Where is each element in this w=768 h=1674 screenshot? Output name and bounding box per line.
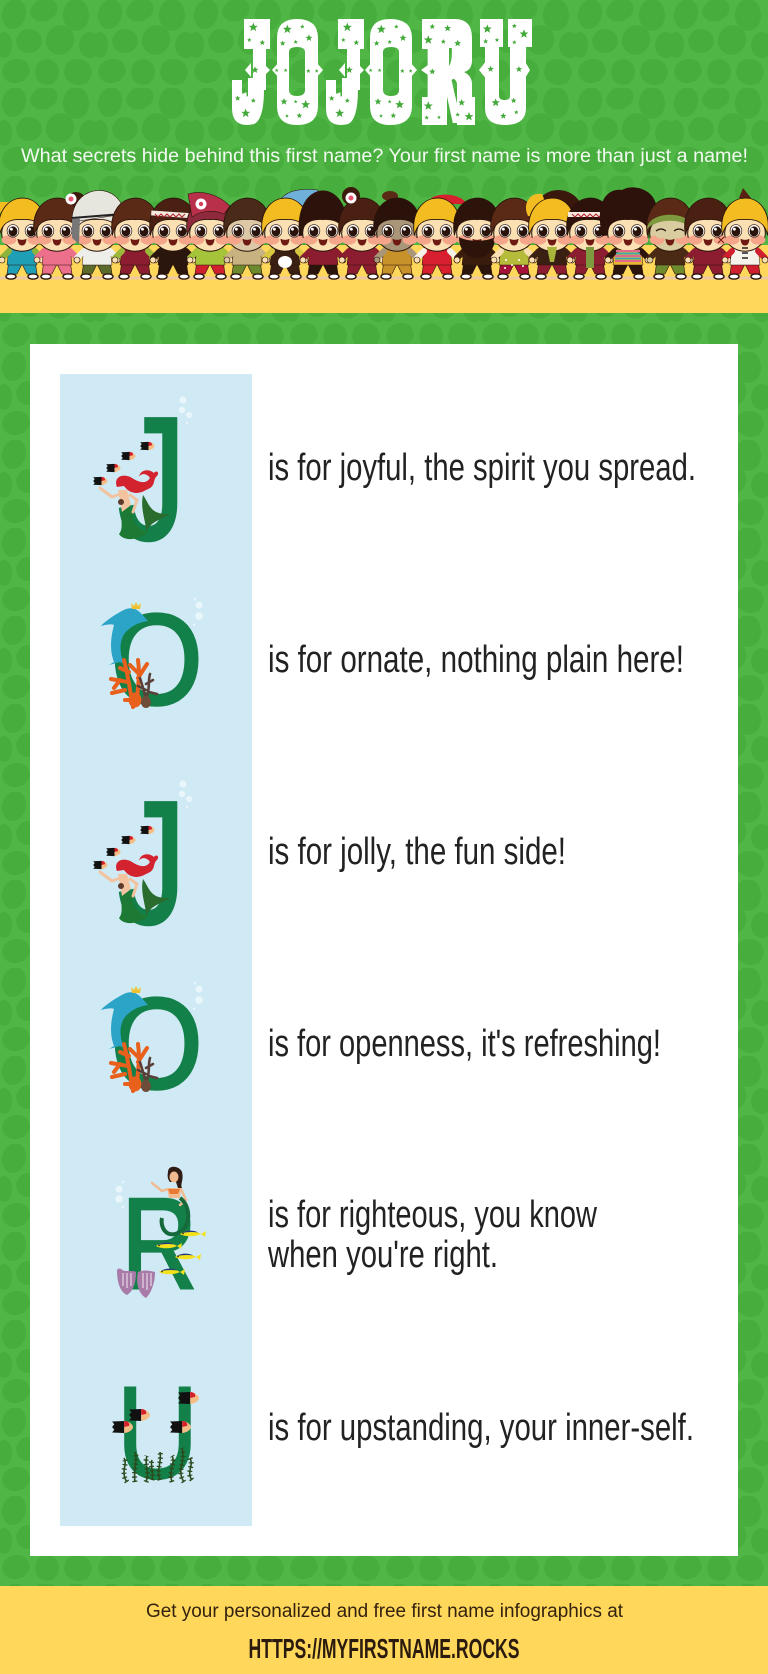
footer caption: Get your personalized and free first name infographics at [146, 1601, 624, 1622]
panel: main white card [30, 344, 738, 1556]
character: maroon and green [112, 198, 158, 279]
character: blond black apron [262, 198, 308, 279]
character: headband maroon green [567, 198, 613, 279]
icon: purple shells [117, 1268, 155, 1298]
yellow band [0, 245, 768, 313]
character: headband black suit [150, 198, 196, 279]
character: maroon x cheek [685, 198, 731, 279]
panel: blue letter column [60, 374, 252, 1526]
character: blond red dress [414, 195, 467, 279]
footer band [0, 1586, 768, 1674]
character: blond overalls [0, 198, 45, 279]
row 3: letter J [93, 766, 566, 961]
row 4: letter O: is for openness, it's refreshing! [268, 1023, 661, 1065]
character: tall dark hair [299, 190, 347, 279]
character: blue cap behind [277, 189, 318, 206]
icon: bubbles [115, 1181, 124, 1208]
row 4: letter O [101, 972, 661, 1116]
character: blond swoop maroon [526, 190, 580, 279]
subtitle: What secrets hide behind this first name? Your first name is more than just a name! [21, 146, 748, 167]
characters parade [0, 187, 768, 280]
character: bearded [454, 198, 500, 279]
row 3: letter J: is for jolly, the fun side! [268, 831, 566, 873]
row 1: letter J [93, 382, 696, 577]
icon: letter U: U [116, 1360, 199, 1507]
row 2: letter O [101, 588, 684, 732]
icon: seaweed [124, 1448, 192, 1482]
character: flower maroon kimono [339, 187, 385, 279]
icon: yellow fish [156, 1231, 206, 1275]
text: letter R line: is for righteous, you know [268, 1194, 597, 1236]
footer URL: HTTPS://MYFIRSTNAME.ROCKS [248, 1633, 520, 1664]
character: green hat grass skirt [647, 198, 693, 279]
icon: black fish [112, 1392, 199, 1433]
row 6: letter U [112, 1360, 694, 1507]
character: red hat [187, 192, 233, 279]
character: dark skin orange wrap [374, 191, 420, 279]
character: grass skirt [224, 198, 270, 279]
text: letter R second line: when you're right. [267, 1234, 498, 1276]
character: blond red white [722, 188, 768, 279]
row 5: letter R [115, 1167, 597, 1315]
character: polka skirt [491, 198, 537, 279]
character: striped shirt [600, 187, 656, 279]
character: flower kimono [34, 192, 86, 279]
icon: letter R: R [122, 1172, 197, 1315]
icon: mermaid [152, 1167, 188, 1234]
character: white turban [72, 190, 124, 279]
